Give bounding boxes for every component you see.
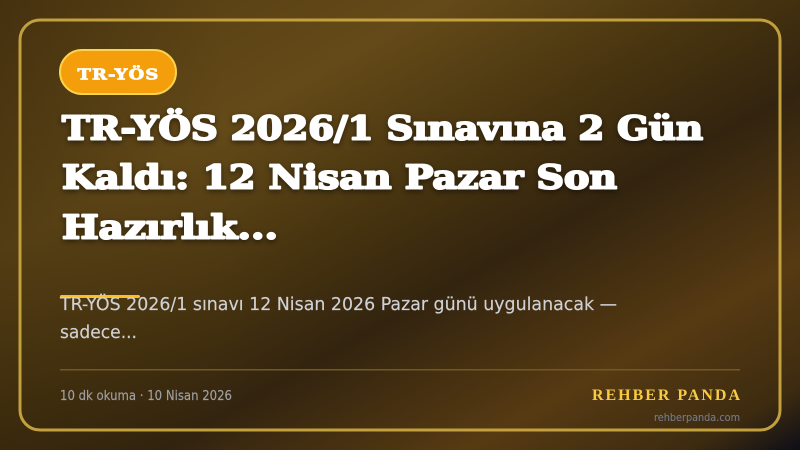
badge: TR-YÖS: TR-YÖS xyxy=(78,64,160,84)
brand name: REHBER PANDA xyxy=(592,387,740,404)
accent line xyxy=(60,295,140,298)
title: Hazırlık... xyxy=(62,208,278,246)
title xyxy=(62,108,703,246)
summary text: TR-YÖS 2026/1 sınavı 12 Nisan 2026 Pazar günü uygulanacak — xyxy=(59,293,617,315)
badge: TR-YÖS xyxy=(60,50,176,94)
website: rehberpanda.com xyxy=(654,411,740,424)
title: Kaldı: 12 Nisan Pazar Son xyxy=(62,158,617,196)
divider xyxy=(60,369,740,370)
summary text: sadece... xyxy=(60,322,137,343)
meta text: 10 dk okuma · 10 Nisan 2026 xyxy=(60,388,232,404)
summary text xyxy=(59,293,617,343)
title: TR-YÖS 2026/1 Sınavına 2 Gün xyxy=(62,108,703,148)
